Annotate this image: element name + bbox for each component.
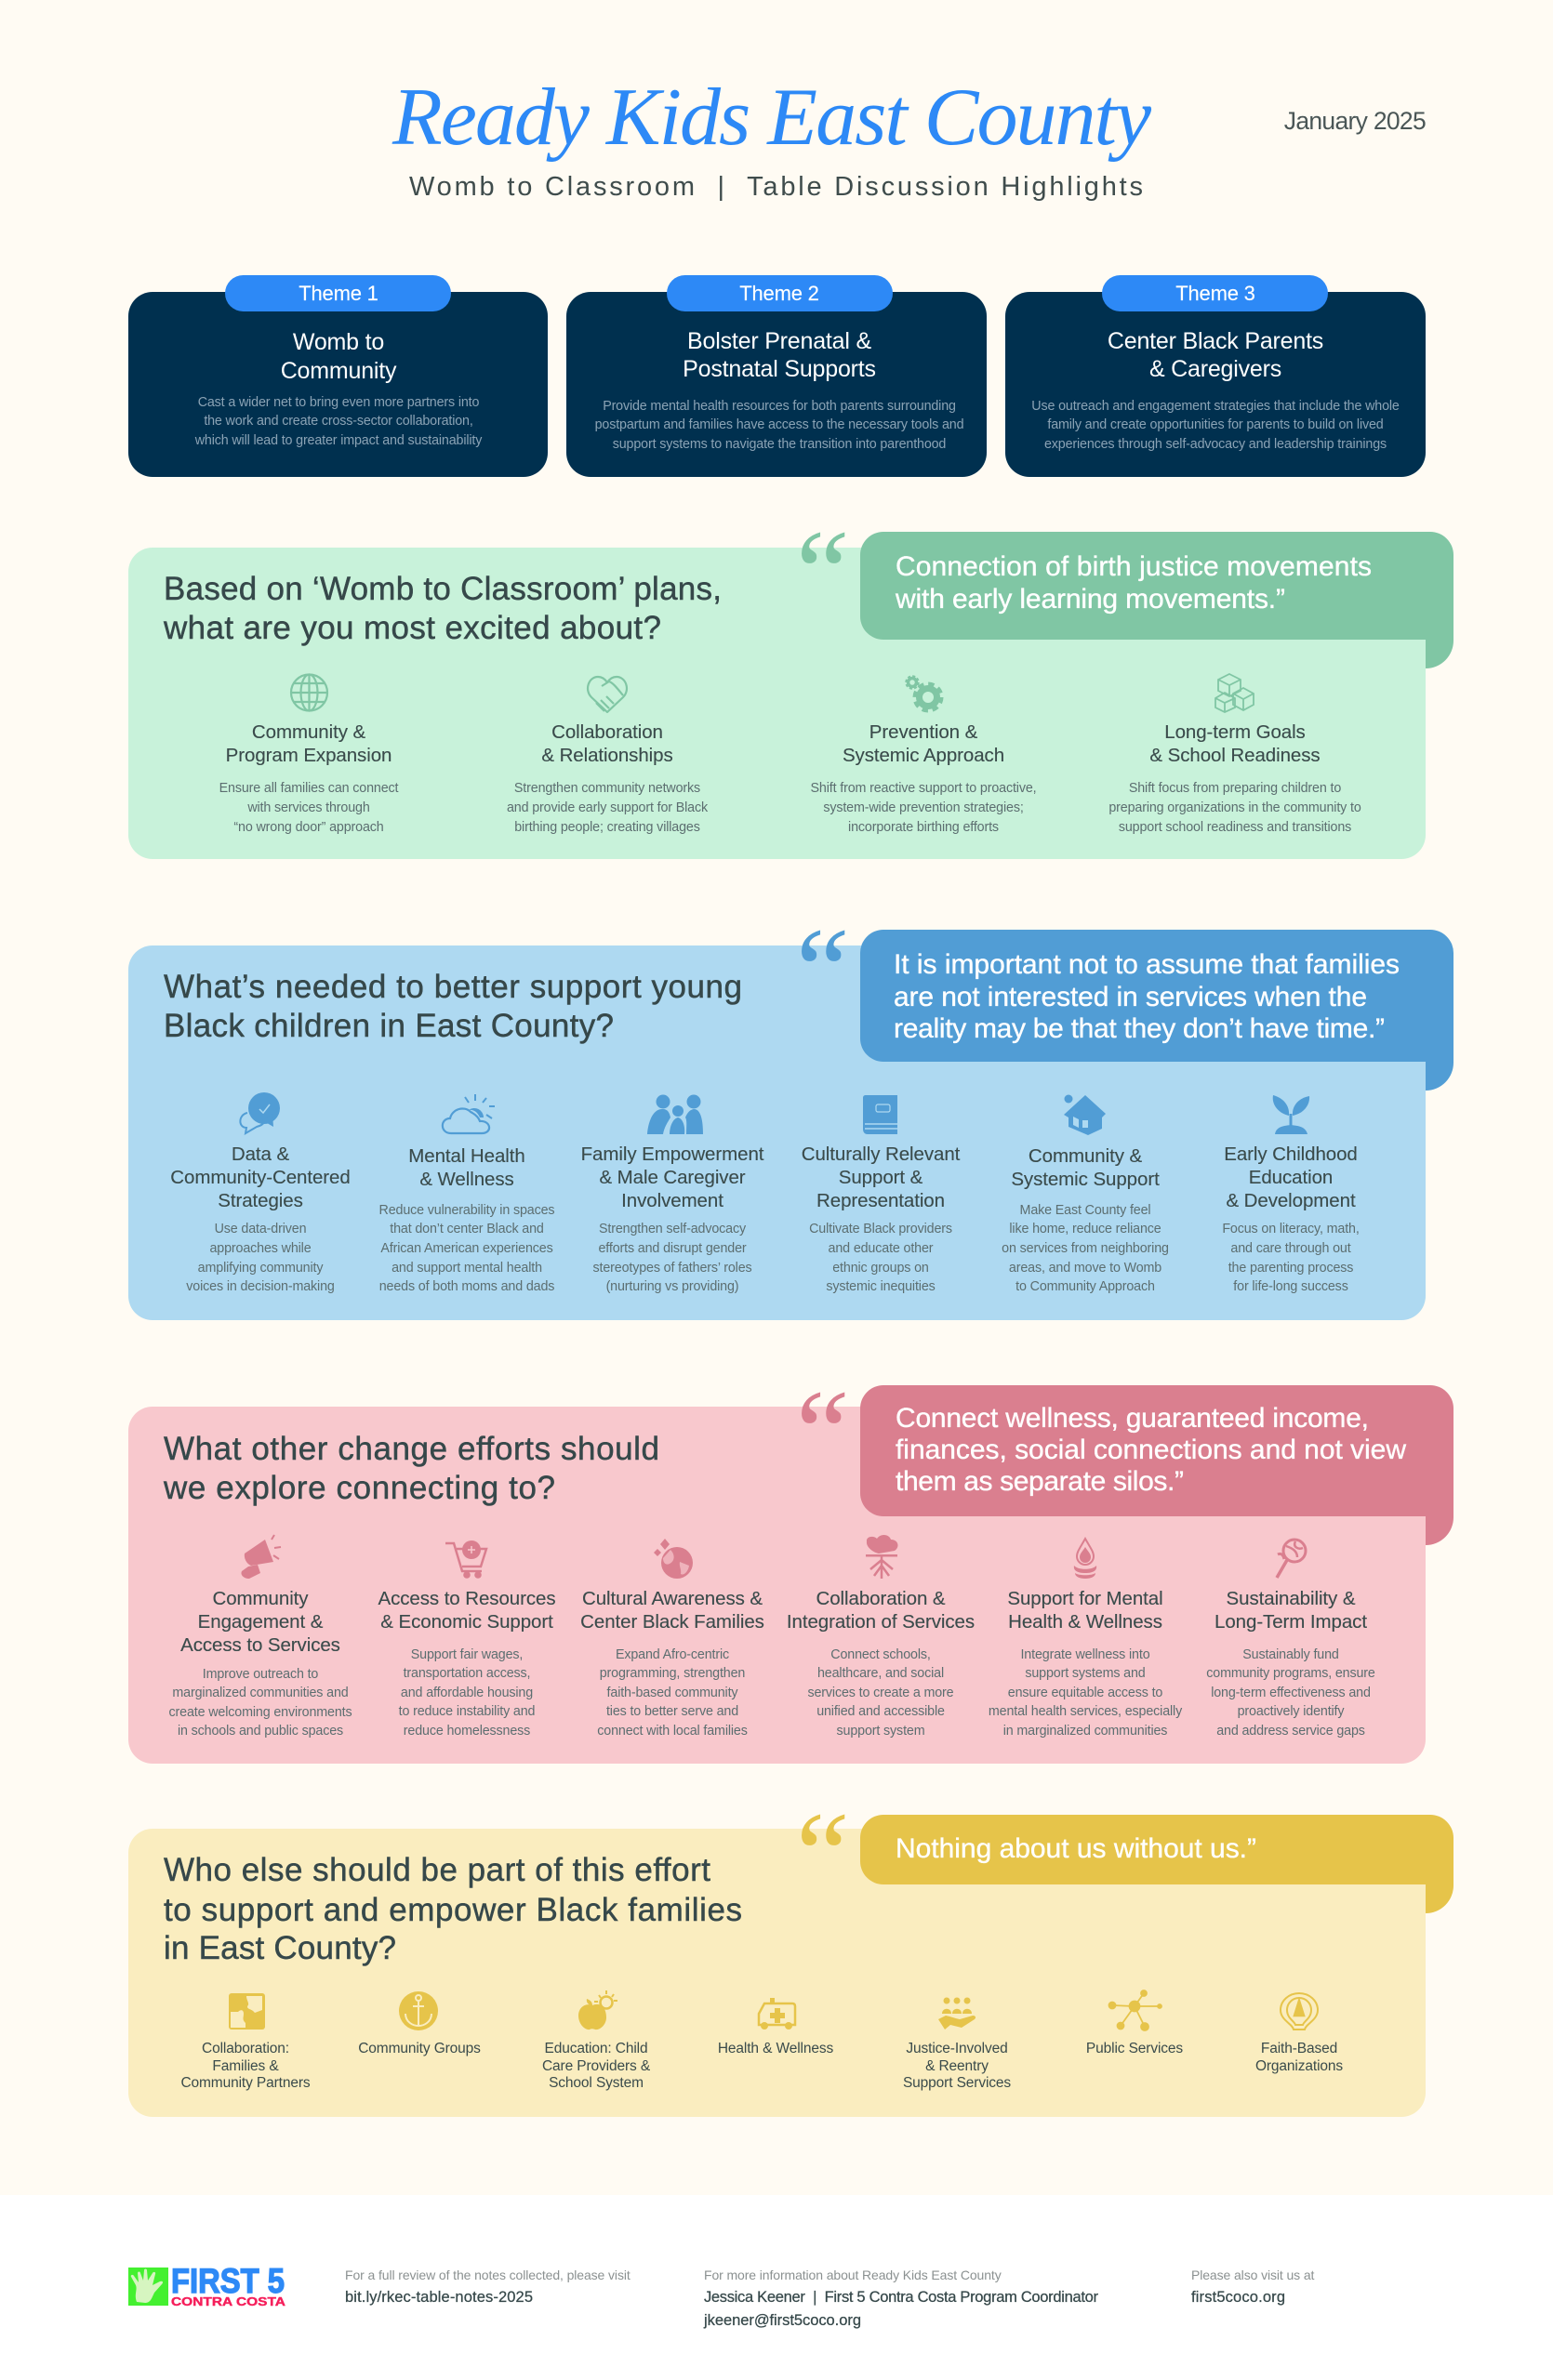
icon: tree with roots bbox=[866, 1535, 897, 1579]
theme 3 heading bbox=[1108, 328, 1323, 382]
item: sustainability and long-term impact: Sustainability & bbox=[1227, 1588, 1356, 1609]
item: support for mental health and wellness: support systems and bbox=[1025, 1666, 1146, 1681]
panel: other change efforts bbox=[128, 1366, 1453, 1764]
theme 2 heading bbox=[683, 328, 876, 382]
theme 3 description bbox=[1031, 399, 1400, 452]
item: community and systemic support: like home, reduce reliance bbox=[1009, 1222, 1161, 1236]
item: long-term goals and school readiness: preparing organizations in the community to bbox=[1108, 800, 1361, 815]
quote bubble bbox=[860, 930, 1453, 1091]
panel: support young Black children bbox=[128, 904, 1453, 1320]
item: public services: Public Services bbox=[1086, 2041, 1183, 2056]
item: community and systemic support: to Community Approach bbox=[1015, 1279, 1155, 1294]
heading bbox=[164, 1852, 742, 1966]
item: collaboration and relationships: Collaboration bbox=[551, 721, 663, 743]
item: access to resources and economic support bbox=[378, 1588, 556, 1739]
item: education child care: School System bbox=[549, 2075, 644, 2091]
item: access to resources and economic support: and affordable housing bbox=[401, 1686, 533, 1700]
footer: contact bbox=[703, 2268, 1099, 2329]
item: culturally relevant support and representation: Support & bbox=[839, 1167, 923, 1188]
item: family empowerment and male caregiver involvement: Strengthen self-advocacy bbox=[599, 1222, 747, 1236]
item: community and systemic support: on services from neighboring bbox=[1002, 1241, 1169, 1256]
item: community engagement and access to services: create welcoming environments bbox=[169, 1705, 352, 1720]
item: family empowerment and male caregiver involvement: Involvement bbox=[621, 1190, 723, 1211]
item: cultural awareness and center Black families: Cultural Awareness & bbox=[582, 1588, 763, 1609]
theme 3 pill bbox=[1102, 275, 1328, 311]
item: support for mental health and wellness bbox=[989, 1588, 1183, 1739]
item: early childhood education and development: for life-long success bbox=[1233, 1279, 1348, 1294]
panel: theme 1 bbox=[128, 275, 548, 477]
item: faith-based organizations bbox=[1255, 2041, 1343, 2074]
icon: sun behind cloud bbox=[443, 1094, 495, 1133]
heading: What’s needed to better support young bbox=[164, 969, 742, 1005]
item: access to resources and economic support: Access to Resources bbox=[378, 1588, 556, 1609]
theme 2 heading: Bolster Prenatal & bbox=[687, 328, 871, 354]
item: community engagement and access to services: marginalized communities and bbox=[172, 1686, 349, 1700]
footer: contact: jkeener@first5coco.org bbox=[703, 2312, 861, 2329]
theme 1 description: Cast a wider net to bring even more partners into bbox=[198, 395, 479, 410]
item: education child care bbox=[542, 2041, 651, 2091]
icon: chat bubbles bbox=[240, 1092, 280, 1133]
item: cultural awareness and center Black families: programming, strengthen bbox=[600, 1666, 745, 1681]
quote bubble: with early learning movements.” bbox=[895, 584, 1285, 615]
quote bubble: Connect wellness, guaranteed income, bbox=[896, 1403, 1369, 1434]
heading: we explore connecting to? bbox=[163, 1470, 555, 1506]
icon: magnifier with leaf bbox=[1277, 1540, 1306, 1578]
item: family empowerment and male caregiver involvement: stereotypes of fathers’ roles bbox=[592, 1261, 752, 1276]
quote mark: “ bbox=[784, 506, 851, 640]
item: community and program expansion: Ensure all families can connect bbox=[219, 781, 399, 796]
icon: ambulance bbox=[759, 1998, 795, 2030]
theme 2 description: postpartum and families have access to the necessary tools and bbox=[595, 417, 964, 432]
icon: book bbox=[863, 1095, 897, 1134]
item: sustainability and long-term impact: and address service gaps bbox=[1216, 1724, 1365, 1739]
quote mark: “ bbox=[784, 1788, 851, 1922]
quote bubble: finances, social connections and not view bbox=[896, 1435, 1406, 1465]
item: support for mental health and wellness: Health & Wellness bbox=[1008, 1611, 1162, 1633]
item: family empowerment and male caregiver involvement: (nurturing vs providing) bbox=[606, 1279, 738, 1294]
item: community and program expansion: Community & bbox=[252, 721, 365, 743]
item: data and community-centered strategies: Use data-driven bbox=[215, 1222, 307, 1236]
theme 2 description: support systems to navigate the transition into parenthood bbox=[613, 437, 946, 452]
panel: most excited about bbox=[128, 506, 1453, 859]
item: prevention and systemic approach: incorporate birthing efforts bbox=[848, 820, 999, 835]
icon: house bbox=[1064, 1095, 1106, 1135]
panel: theme 3 bbox=[1005, 275, 1426, 477]
item: faith-based organizations: Organizations bbox=[1255, 2058, 1343, 2074]
theme 1 description bbox=[194, 395, 483, 448]
item: collaboration families and community partners: Families & bbox=[212, 2058, 279, 2074]
heading bbox=[163, 1431, 659, 1506]
item: prevention and systemic approach: system-wide prevention strategies; bbox=[823, 800, 1024, 815]
item: collaboration families and community partners: Collaboration: bbox=[202, 2041, 289, 2056]
item: collaboration and integration of services: services to create a more bbox=[807, 1686, 954, 1700]
item: collaboration and integration of services: Integration of Services bbox=[787, 1611, 975, 1633]
item: health and wellness: Health & Wellness bbox=[718, 2041, 834, 2056]
quote bubble: Connection of birth justice movements bbox=[896, 551, 1372, 582]
item: long-term goals and school readiness bbox=[1108, 721, 1361, 835]
theme 3 pill: Theme 3 bbox=[1175, 282, 1255, 305]
theme 1 pill bbox=[225, 275, 451, 311]
item: data and community-centered strategies: Strategies bbox=[218, 1190, 303, 1211]
item: family empowerment and male caregiver involvement: & Male Caregiver bbox=[599, 1167, 746, 1188]
theme 1 heading: Community bbox=[281, 358, 397, 384]
item: justice-involved and reentry support services: Justice-Involved bbox=[906, 2041, 1008, 2056]
item: sustainability and long-term impact: community programs, ensure bbox=[1206, 1666, 1375, 1681]
icon: hand holding people bbox=[938, 1997, 976, 2030]
item: support for mental health and wellness: ensure equitable access to bbox=[1008, 1686, 1162, 1700]
item: community and program expansion bbox=[219, 721, 399, 835]
icon: megaphone bbox=[241, 1535, 281, 1579]
icon: shopping cart bbox=[445, 1540, 486, 1579]
item: faith-based organizations: Faith-Based bbox=[1261, 2041, 1337, 2056]
item: collaboration and relationships: Strengthen community networks bbox=[514, 781, 700, 796]
item: support for mental health and wellness: mental health services, especially bbox=[989, 1704, 1183, 1719]
item: mental health and wellness: & Wellness bbox=[419, 1169, 514, 1190]
item: early childhood education and development: Early Childhood bbox=[1224, 1144, 1358, 1165]
item: education child care: Care Providers & bbox=[542, 2058, 651, 2074]
item: long-term goals and school readiness: support school readiness and transitions bbox=[1119, 820, 1351, 835]
theme 2 pill bbox=[667, 275, 893, 311]
item: culturally relevant support and representation: Representation bbox=[816, 1190, 945, 1211]
item: community and systemic support: areas, and move to Womb bbox=[1009, 1261, 1161, 1276]
item: prevention and systemic approach: Prevention & bbox=[869, 721, 978, 743]
item: collaboration families and community partners: Community Partners bbox=[180, 2075, 311, 2091]
icon: network bbox=[1108, 1990, 1161, 2030]
item: mental health and wellness: and support mental health bbox=[392, 1261, 542, 1276]
item: community engagement and access to services: Engagement & bbox=[198, 1611, 324, 1633]
item: community and program expansion: “no wrong door” approach bbox=[233, 820, 384, 835]
item: justice-involved and reentry support services: & Reentry bbox=[925, 2058, 989, 2074]
icon: apple with lightbulb bbox=[578, 1990, 617, 2030]
item: family empowerment and male caregiver involvement: Family Empowerment bbox=[581, 1144, 764, 1165]
item: prevention and systemic approach: Shift from reactive support to proactive, bbox=[811, 781, 1036, 796]
item: community engagement and access to services bbox=[169, 1588, 352, 1739]
item: prevention and systemic approach: Systemic Approach bbox=[843, 745, 1004, 766]
heading: Based on ‘Womb to Classroom’ plans, bbox=[164, 571, 722, 607]
icon: globe with sparkles bbox=[654, 1539, 693, 1579]
item: long-term goals and school readiness: Long-term Goals bbox=[1164, 721, 1306, 743]
item: cultural awareness and center Black families: faith-based community bbox=[607, 1686, 738, 1700]
item: cultural awareness and center Black families: Expand Afro-centric bbox=[616, 1647, 729, 1662]
quote bubble: are not interested in services when the bbox=[894, 982, 1367, 1012]
item: access to resources and economic support: transportation access, bbox=[404, 1666, 530, 1681]
item: community engagement and access to services: in schools and public spaces bbox=[178, 1724, 343, 1739]
date: January 2025 bbox=[1284, 107, 1426, 135]
heading: in East County? bbox=[164, 1930, 396, 1966]
item: collaboration and relationships: and provide early support for Black bbox=[507, 800, 709, 815]
theme 3 heading: Center Black Parents bbox=[1108, 328, 1323, 354]
item: community and systemic support: Community & bbox=[1029, 1145, 1142, 1167]
theme 3 description: family and create opportunities for parents to build on lived bbox=[1047, 417, 1384, 432]
item: collaboration and integration of services: Collaboration & bbox=[816, 1588, 946, 1609]
heading bbox=[164, 969, 742, 1044]
quote bubble: reality may be that they don’t have time.” bbox=[894, 1013, 1385, 1044]
subtitle: Womb to Classroom | Table Discussion Highlights bbox=[409, 172, 1143, 202]
item: support for mental health and wellness: in marginalized communities bbox=[1003, 1724, 1167, 1739]
footer: notes link: For a full review of the notes collected, please visit bbox=[345, 2268, 630, 2282]
footer: notes link bbox=[345, 2268, 630, 2306]
quote bubble bbox=[860, 1385, 1453, 1545]
item: culturally relevant support and representation: and educate other bbox=[829, 1241, 934, 1256]
item: collaboration and integration of services: support system bbox=[837, 1724, 924, 1739]
icon: handshake heart bbox=[588, 677, 627, 712]
item: family empowerment and male caregiver involvement: efforts and disrupt gender bbox=[598, 1241, 747, 1256]
item: collaboration families and community partners bbox=[180, 2041, 311, 2091]
item: mental health and wellness: Reduce vulnerability in spaces bbox=[379, 1203, 554, 1218]
theme 3 description: Use outreach and engagement strategies that include the whole bbox=[1031, 399, 1400, 414]
item: mental health and wellness bbox=[379, 1145, 554, 1294]
icon: gears bbox=[906, 677, 941, 710]
theme 2 pill: Theme 2 bbox=[739, 282, 819, 305]
item: access to resources and economic support: reduce homelessness bbox=[404, 1724, 530, 1739]
item: education child care: Education: Child bbox=[545, 2041, 647, 2056]
item: data and community-centered strategies: Data & bbox=[232, 1144, 289, 1165]
item: early childhood education and development: Education bbox=[1249, 1167, 1333, 1188]
item: sustainability and long-term impact: Sustainably fund bbox=[1242, 1647, 1339, 1662]
quote bubble bbox=[860, 532, 1453, 668]
icon: water drop ripples bbox=[1074, 1539, 1096, 1579]
item: mental health and wellness: Mental Health bbox=[408, 1145, 525, 1167]
item: justice-involved and reentry support services bbox=[903, 2041, 1011, 2091]
heading: What other change efforts should bbox=[164, 1431, 659, 1467]
panel: theme 2 bbox=[566, 275, 987, 477]
item: collaboration and integration of services: healthcare, and social bbox=[817, 1666, 944, 1681]
heading: Who else should be part of this effort bbox=[164, 1852, 710, 1888]
quote mark: “ bbox=[784, 1366, 851, 1500]
footer: website: Please also visit us at bbox=[1191, 2268, 1315, 2282]
item: community and program expansion: with services through bbox=[246, 800, 370, 815]
item: prevention and systemic approach bbox=[811, 721, 1036, 835]
item: sustainability and long-term impact bbox=[1206, 1588, 1375, 1739]
footer: website: first5coco.org bbox=[1191, 2289, 1285, 2306]
item: community engagement and access to services: Community bbox=[213, 1588, 309, 1609]
logo: First 5 Contra Costa: CONTRA COSTA bbox=[171, 2294, 286, 2308]
item: access to resources and economic support: Support fair wages, bbox=[411, 1647, 523, 1662]
item: early childhood education and development: the parenting process bbox=[1228, 1261, 1353, 1276]
item: mental health and wellness: African American experiences bbox=[380, 1241, 553, 1256]
title: Ready Kids East County bbox=[392, 73, 1152, 163]
item: early childhood education and development: and care through out bbox=[1230, 1241, 1351, 1256]
item: access to resources and economic support: to reduce instability and bbox=[399, 1704, 536, 1719]
quote bubble: them as separate silos.” bbox=[896, 1466, 1184, 1497]
quote mark: “ bbox=[784, 904, 851, 1038]
panel: who else should be part bbox=[128, 1788, 1453, 2117]
item: culturally relevant support and representation: ethnic groups on bbox=[832, 1261, 929, 1276]
theme 3 description: experiences through self-advocacy and leadership trainings bbox=[1044, 437, 1387, 452]
theme 1 description: the work and create cross-sector collaboration, bbox=[204, 414, 473, 429]
item: access to resources and economic support: & Economic Support bbox=[380, 1611, 553, 1633]
heading: to support and empower Black families bbox=[164, 1892, 742, 1928]
icon: puzzle bbox=[229, 1993, 265, 2030]
theme 1 description: which will lead to greater impact and sustainability bbox=[194, 433, 483, 448]
item: justice-involved and reentry support services: Support Services bbox=[903, 2075, 1011, 2091]
heading: what are you most excited about? bbox=[163, 610, 661, 646]
item: collaboration and relationships: birthing people; creating villages bbox=[514, 820, 700, 835]
footer: website bbox=[1191, 2268, 1315, 2306]
item: long-term goals and school readiness: & School Readiness bbox=[1149, 745, 1321, 766]
item: family empowerment and male caregiver involvement bbox=[581, 1144, 764, 1294]
item: sustainability and long-term impact: proactively identify bbox=[1238, 1704, 1345, 1719]
quote bubble: It is important not to assume that families bbox=[894, 949, 1400, 980]
footer bbox=[128, 2261, 1315, 2329]
item: long-term goals and school readiness: Shift focus from preparing children to bbox=[1129, 781, 1341, 796]
item: community and systemic support: Make East County feel bbox=[1020, 1203, 1150, 1218]
quote bubble: Nothing about us without us.” bbox=[896, 1833, 1256, 1864]
footer: contact: Jessica Keener | First 5 Contra Costa Program Coordinator bbox=[704, 2289, 1099, 2306]
item: cultural awareness and center Black families: ties to better serve and bbox=[606, 1704, 738, 1719]
item: mental health and wellness: that don’t center Black and bbox=[390, 1222, 544, 1236]
logo: First 5 Contra Costa: FIRST 5 bbox=[171, 2261, 285, 2300]
quote bubble bbox=[860, 1815, 1453, 1913]
item: culturally relevant support and representation: Culturally Relevant bbox=[802, 1144, 961, 1165]
item: support for mental health and wellness: Integrate wellness into bbox=[1020, 1647, 1150, 1662]
item: early childhood education and development bbox=[1222, 1144, 1360, 1294]
item: community and program expansion: Program Expansion bbox=[226, 745, 392, 766]
icon: sprout bbox=[1273, 1095, 1309, 1134]
item: data and community-centered strategies: Community-Centered bbox=[170, 1167, 351, 1188]
item: collaboration and integration of services bbox=[787, 1588, 975, 1739]
theme 2 heading: Postnatal Supports bbox=[683, 356, 876, 382]
item: early childhood education and development: & Development bbox=[1226, 1190, 1356, 1211]
item: community engagement and access to services: Improve outreach to bbox=[203, 1667, 318, 1682]
item: community and systemic support: Systemic Support bbox=[1011, 1169, 1160, 1190]
icon: globe bbox=[291, 675, 327, 710]
item: culturally relevant support and representation: systemic inequities bbox=[826, 1279, 936, 1294]
item: collaboration and integration of services: unified and accessible bbox=[816, 1704, 945, 1719]
item: sustainability and long-term impact: Long-Term Impact bbox=[1215, 1611, 1367, 1633]
footer: contact: For more information about Ready Kids East County bbox=[704, 2268, 1002, 2282]
theme 2 description: Provide mental health resources for both parents surrounding bbox=[603, 399, 956, 414]
theme 1 pill: Theme 1 bbox=[299, 282, 378, 305]
theme 1 heading: Womb to bbox=[293, 329, 384, 355]
item: community groups: Community Groups bbox=[358, 2041, 481, 2056]
item: sustainability and long-term impact: long-term effectiveness and bbox=[1211, 1686, 1371, 1700]
item: collaboration and integration of services: Connect schools, bbox=[830, 1647, 931, 1662]
item: collaboration and relationships bbox=[507, 721, 709, 835]
icon: anchor bbox=[399, 1991, 438, 2030]
item: data and community-centered strategies: amplifying community bbox=[198, 1261, 324, 1276]
item: mental health and wellness: needs of both moms and dads bbox=[379, 1279, 554, 1294]
item: cultural awareness and center Black families: Center Black Families bbox=[580, 1611, 764, 1633]
heading bbox=[163, 571, 722, 646]
heading: Black children in East County? bbox=[164, 1008, 614, 1044]
icon: family bbox=[647, 1095, 703, 1134]
item: culturally relevant support and representation: Cultivate Black providers bbox=[809, 1222, 952, 1236]
item: community engagement and access to services: Access to Services bbox=[180, 1634, 340, 1656]
item: early childhood education and development: Focus on literacy, math, bbox=[1222, 1222, 1360, 1236]
item: cultural awareness and center Black families bbox=[580, 1588, 764, 1739]
icon: faith lightbulb bbox=[1281, 1993, 1318, 2030]
item: data and community-centered strategies: approaches while bbox=[209, 1241, 312, 1256]
item: community and systemic support bbox=[1002, 1145, 1169, 1294]
icon: alphabet blocks bbox=[1215, 674, 1254, 712]
theme 3 heading: & Caregivers bbox=[1149, 356, 1281, 382]
item: cultural awareness and center Black families: connect with local families bbox=[597, 1724, 748, 1739]
footer: notes link: bit.ly/rkec-table-notes-2025 bbox=[345, 2289, 533, 2306]
item: data and community-centered strategies bbox=[170, 1144, 351, 1294]
theme 1 heading bbox=[281, 329, 397, 384]
item: support for mental health and wellness: Support for Mental bbox=[1007, 1588, 1163, 1609]
item: collaboration and relationships: & Relationships bbox=[541, 745, 673, 766]
theme 2 description bbox=[595, 399, 964, 452]
item: data and community-centered strategies: voices in decision-making bbox=[186, 1279, 335, 1294]
logo: First 5 Contra Costa bbox=[128, 2261, 286, 2308]
item: culturally relevant support and representation bbox=[802, 1144, 961, 1294]
